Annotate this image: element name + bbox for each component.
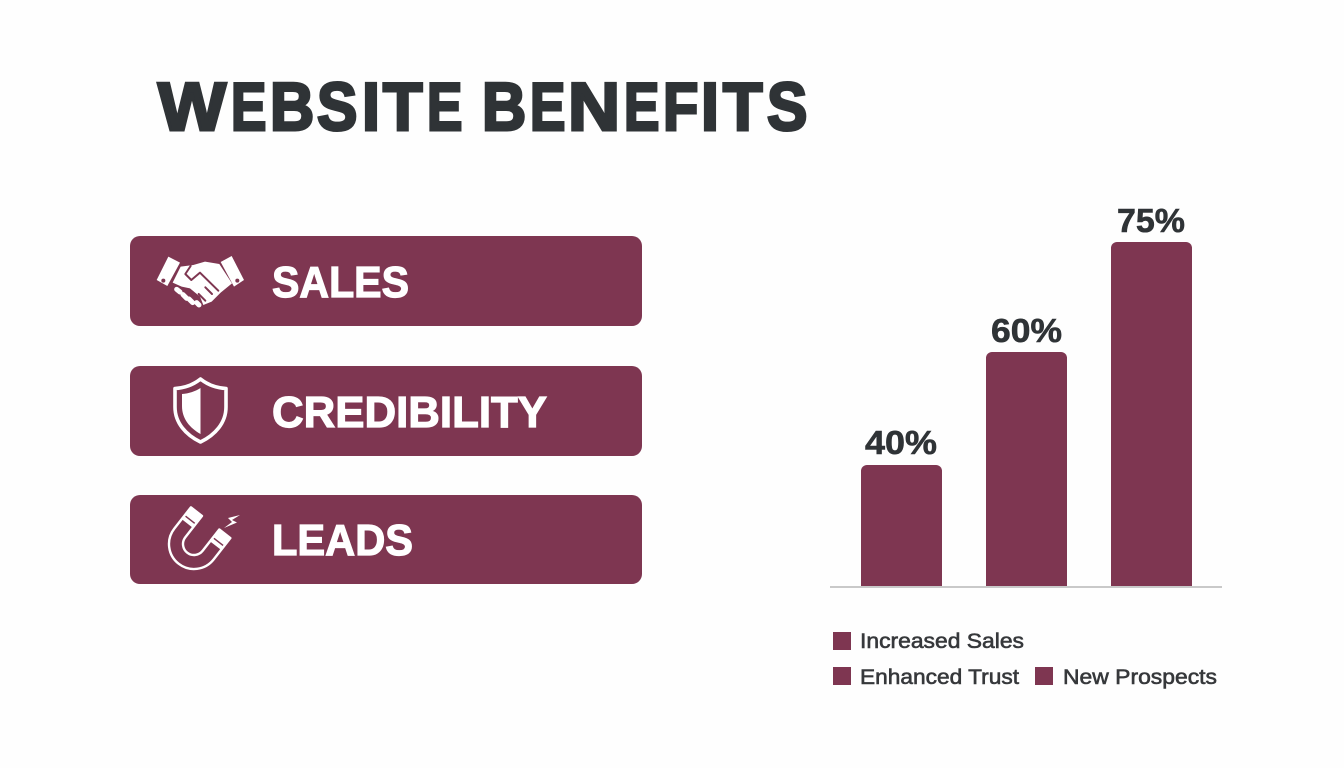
label: credibility: CREDIBILITY	[272, 388, 547, 437]
title: S	[317, 69, 357, 145]
title: T	[723, 69, 763, 145]
bar: 60%: 60%	[991, 312, 1062, 349]
label: sales: SALES	[272, 258, 409, 307]
panel: leads	[130, 495, 642, 584]
title: N	[568, 69, 620, 145]
bar: 40%	[861, 424, 942, 586]
icon: shield	[175, 379, 226, 442]
title: B	[270, 69, 314, 145]
icon: magnet	[159, 507, 240, 579]
title: T	[383, 69, 423, 145]
bar: 60%	[986, 312, 1067, 586]
title: E	[530, 69, 565, 145]
legend: new prospects: New Prospects	[1063, 666, 1217, 689]
bar: 75%: 75%	[1117, 202, 1185, 239]
title	[156, 69, 807, 145]
bar: 75%	[1111, 202, 1192, 586]
bar chart	[830, 202, 1222, 588]
legend	[833, 630, 1217, 689]
bar: 40%: 40%	[865, 424, 937, 461]
icon: handshake	[157, 256, 244, 305]
title: S	[767, 69, 807, 145]
legend: increased sales: Increased Sales	[860, 630, 1024, 653]
label: leads: LEADS	[272, 516, 413, 565]
title: E	[427, 69, 462, 145]
legend: enhanced trust: Enhanced Trust	[860, 666, 1019, 689]
title: E	[624, 69, 659, 145]
panel: sales	[130, 236, 642, 326]
title: W	[158, 69, 226, 145]
panel: credibility	[130, 366, 642, 456]
title: E	[231, 69, 266, 145]
title: F	[662, 69, 698, 145]
title: B	[482, 69, 526, 145]
title: I	[362, 69, 380, 145]
title: I	[701, 69, 719, 145]
